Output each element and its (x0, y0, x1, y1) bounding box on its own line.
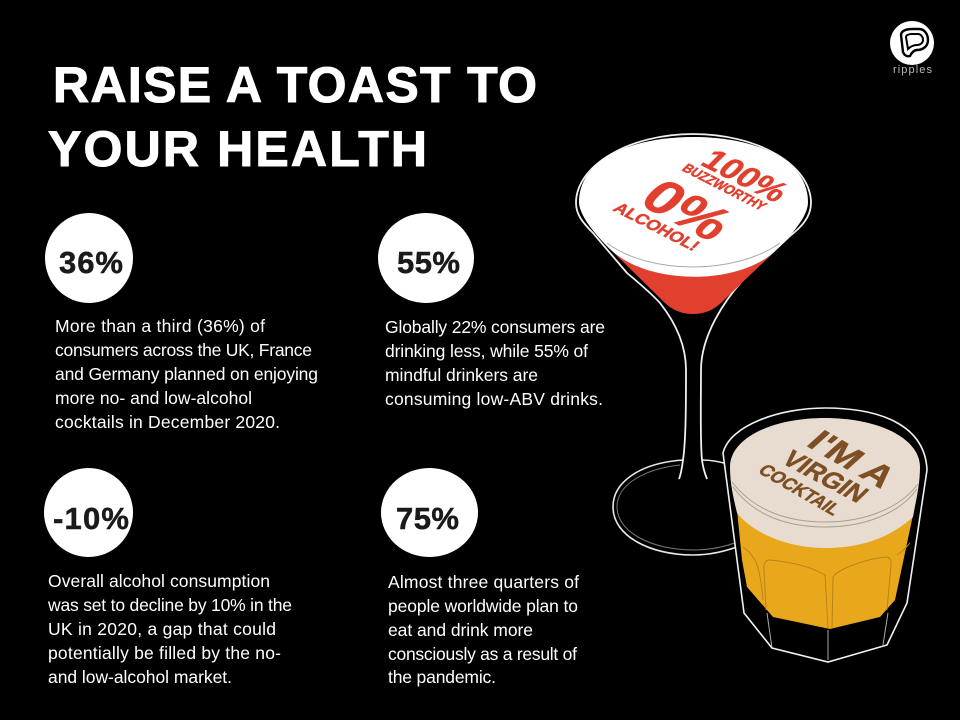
glass facets (743, 543, 910, 628)
stat panel: -10%: and low-alcohol market. (48, 667, 232, 687)
stat panel: 75%: people worldwide plan to (388, 596, 578, 616)
stat panel: 75%: the pandemic. (388, 667, 496, 687)
illustration: martini glass (576, 134, 811, 555)
stat panel: 55%: Globally 22% consumers are (385, 317, 605, 337)
glass foot (613, 460, 742, 555)
glass outline (723, 408, 927, 662)
stat panel: 55% (378, 213, 605, 409)
stat panel: 36%: More than a third (36%) of (55, 316, 265, 336)
stat panel: 75%: consciously as a result of (388, 644, 577, 664)
stat panel: 36% (45, 213, 318, 432)
stat panel: 36%: cocktails in December 2020. (55, 412, 280, 432)
printed message: 100% buzzworthy 0% alcohol: ALCOHOL! (609, 200, 703, 254)
stat panel: 36%: consumers across the UK, France (55, 340, 312, 360)
stat panel: -10%: UK in 2020, a gap that could (48, 619, 276, 639)
printed message: I'm a virgin cocktail: VIRGIN (776, 446, 874, 508)
illustration: rocks glass (723, 408, 927, 662)
logo: ripples (890, 21, 934, 76)
red drink (610, 249, 775, 314)
glass stem and bowl outline (576, 134, 811, 479)
glass base lines (767, 613, 888, 660)
title: RAISE A TOAST TO (53, 57, 537, 113)
stat panel: 55%: drinking less, while 55% of (385, 341, 588, 361)
stat panel: 75% (381, 468, 579, 687)
stat panel: -10%: potentially be filled by the no- (48, 643, 281, 663)
printed message: I'm a virgin cocktail: COCKTAIL (754, 460, 846, 519)
stat panel: -10%: was set to decline by 10% in the (47, 595, 292, 615)
white garnish surface (579, 137, 808, 277)
stat panel: 75%: 75% (396, 501, 459, 536)
foam lines (732, 482, 918, 527)
stat panel: -10%: Overall alcohol consumption (48, 571, 270, 591)
printed message: 100% buzzworthy 0% alcohol: 100% (694, 143, 797, 208)
stat panel: 36%: 36% (59, 245, 123, 280)
foam top (730, 418, 920, 548)
printed message: I'm a virgin cocktail (754, 424, 904, 519)
title (48, 57, 537, 177)
printed message: I'm a virgin cocktail: I'M A (799, 424, 904, 494)
stat panel: -10%: -10% (53, 501, 129, 536)
stat panel: 55%: consuming low-ABV drinks. (385, 389, 603, 409)
surface rim line (607, 243, 780, 267)
stat panel: 36%: more no- and low-alcohol (55, 388, 252, 408)
printed message: 100% buzzworthy 0% alcohol: 0% (628, 170, 745, 251)
stat panel: 55%: 55% (397, 245, 460, 280)
stat panel: 55%: mindful drinkers are (385, 365, 538, 385)
stat panel: 75%: Almost three quarters of (388, 572, 579, 592)
stat panel: 75%: eat and drink more (388, 620, 533, 640)
glass body mask (723, 408, 927, 662)
printed message: 100% buzzworthy 0% alcohol (609, 143, 797, 254)
printed message: 100% buzzworthy 0% alcohol: BUZZWORTHY (679, 161, 771, 213)
title: YOUR HEALTH (48, 121, 427, 177)
logo: ripples: ripples (893, 64, 932, 76)
stat panel: -10% (44, 468, 292, 687)
stat panel: 36%: and Germany planned on enjoying (55, 364, 318, 384)
yellow drink (737, 510, 913, 629)
